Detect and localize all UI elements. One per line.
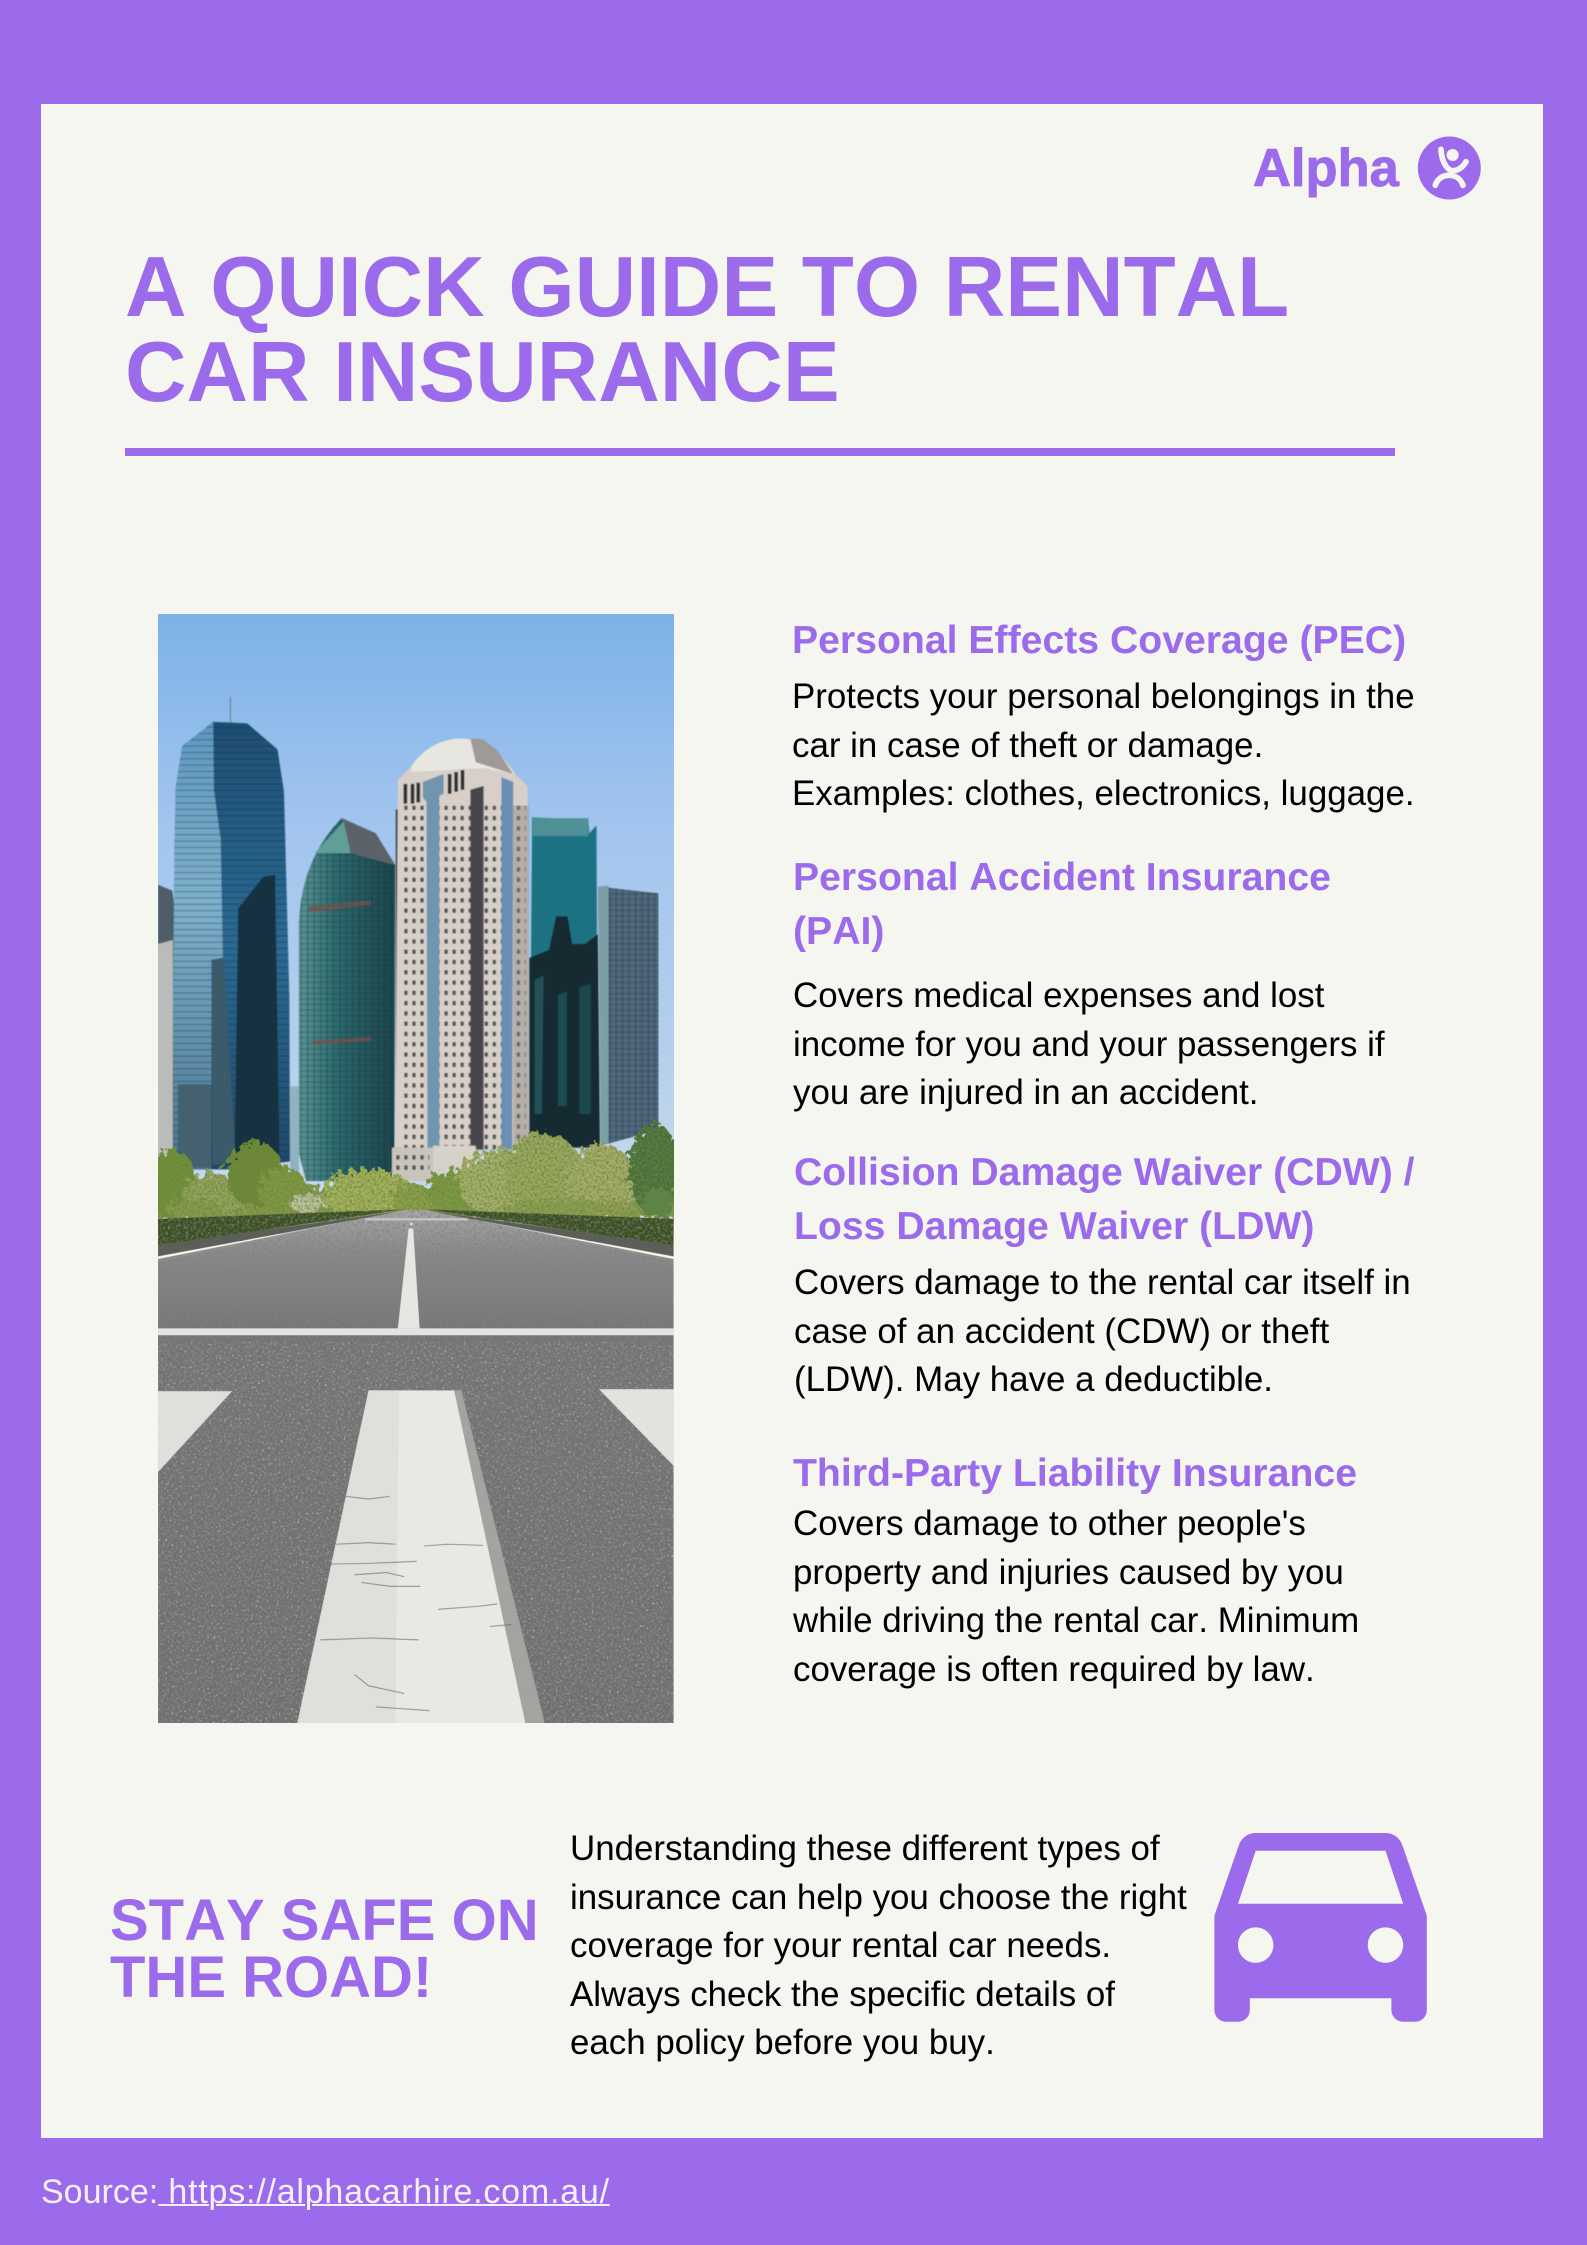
photo: skyscrapers and road xyxy=(158,614,674,1723)
skyline xyxy=(158,697,659,1181)
section: Collision Damage Waiver: Covers damage to the rental car itself in xyxy=(794,1263,1411,1302)
section: Personal Effects Coverage: Examples: clothes, electronics, luggage. xyxy=(792,774,1415,813)
section: Personal Accident Insurance xyxy=(793,856,1385,1112)
text block: conclusion: Always check the specific details of xyxy=(570,1974,1115,2014)
callout: stay safe heading xyxy=(110,1888,539,2010)
hedges xyxy=(158,1209,404,1246)
section: Third-Party Liability: coverage is often required by law. xyxy=(793,1650,1315,1688)
text block: conclusion: Understanding these different types of xyxy=(570,1829,1160,1868)
section: Third-Party Liability: while driving the rental car. Minimum xyxy=(793,1601,1359,1640)
section: Third-Party Liability: property and injuries caused by you xyxy=(793,1552,1344,1592)
section: Personal Effects Coverage: Personal Effects Coverage (PEC) xyxy=(792,619,1406,662)
title: CAR INSURANCE xyxy=(125,324,840,420)
section: Collision Damage Waiver: Loss Damage Waiver (LDW) xyxy=(794,1205,1314,1248)
section: Collision Damage Waiver: Collision Damage Waiver (CDW) / xyxy=(794,1151,1415,1194)
callout: stay safe heading: THE ROAD! xyxy=(110,1945,432,2010)
tree line xyxy=(147,1123,683,1221)
icon: car xyxy=(1214,1833,1427,2022)
source line: Source: https://alphacarhire.com.au/ xyxy=(41,2172,610,2210)
logo: Alpha: Alpha xyxy=(1253,139,1400,198)
section: Personal Accident Insurance: you are injured in an accident. xyxy=(793,1073,1259,1112)
logo: Alpha xyxy=(1253,136,1481,200)
section: Collision Damage Waiver: (LDW). May have a deductible. xyxy=(794,1360,1273,1399)
section: Third-Party Liability xyxy=(793,1452,1359,1688)
section: Collision Damage Waiver: case of an accident (CDW) or theft xyxy=(794,1312,1329,1350)
sky xyxy=(158,614,674,1234)
title: A QUICK GUIDE TO RENTAL xyxy=(125,240,1289,335)
text block: conclusion xyxy=(570,1829,1187,2062)
title xyxy=(125,240,1289,420)
section: Personal Accident Insurance: Personal Accident Insurance xyxy=(793,856,1331,899)
section: Personal Accident Insurance: Covers medical expenses and lost xyxy=(793,976,1324,1015)
section: Personal Effects Coverage: Protects your personal belongings in the xyxy=(792,677,1415,716)
section: Personal Accident Insurance: income for you and your passengers if xyxy=(793,1024,1385,1064)
asphalt xyxy=(158,1210,674,1724)
cracks xyxy=(320,1496,511,1711)
section: Personal Effects Coverage: car in case of theft or damage. xyxy=(792,726,1263,764)
text block: conclusion: coverage for your rental car needs. xyxy=(570,1926,1111,1965)
section: Third-Party Liability: Third-Party Liability Insurance xyxy=(793,1452,1357,1495)
road xyxy=(147,1123,683,1724)
lane markings xyxy=(365,1218,468,1220)
text block: conclusion: insurance can help you choose the right xyxy=(570,1878,1187,1916)
section: Personal Accident Insurance: (PAI) xyxy=(793,910,884,953)
callout: stay safe heading: STAY SAFE ON xyxy=(110,1888,539,1953)
section: Collision Damage Waiver xyxy=(794,1151,1415,1399)
text block: conclusion: each policy before you buy. xyxy=(570,2023,995,2062)
section: Personal Effects Coverage xyxy=(792,619,1415,813)
section: Third-Party Liability: Covers damage to other people's xyxy=(793,1504,1306,1543)
